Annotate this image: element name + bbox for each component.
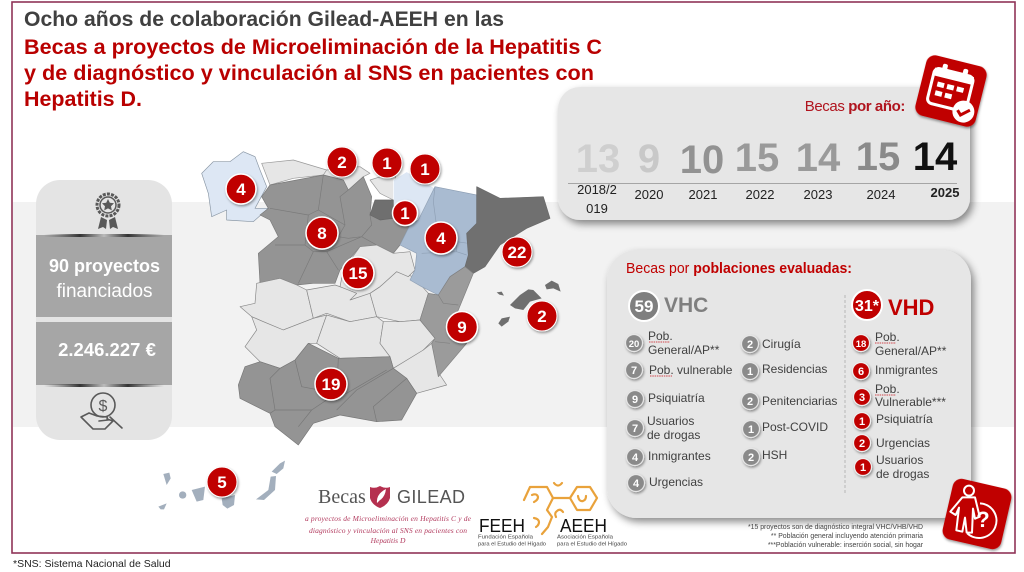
logo: FEEH AEEH: FEEH bbox=[479, 515, 525, 536]
chart: yearly values: 10 bbox=[680, 138, 724, 182]
background band bbox=[13, 202, 1014, 427]
icon: patient with question mark bbox=[941, 477, 1013, 551]
chart: yearly values: 9 bbox=[638, 137, 660, 181]
chart: yearly values: 2021 bbox=[689, 187, 717, 202]
column: VHD: Pob. bbox=[875, 382, 900, 396]
column: VHC: Usuarios bbox=[647, 414, 694, 428]
region: Asturias bbox=[262, 160, 327, 185]
title: Ocho años de colaboración Gilead-AEEH en las bbox=[24, 8, 504, 31]
footnotes: ***Población vulnerable: inserción social, sin hogar bbox=[768, 542, 924, 549]
footnotes: *15 proyectos son de diagnóstico integral VHC/VHB/VHD bbox=[748, 524, 923, 531]
heading: VHC 59: 59 bbox=[635, 297, 653, 316]
column: VHC: de drogas bbox=[647, 428, 700, 442]
column: VHC: 2 bbox=[748, 452, 754, 464]
region: Extremadura bbox=[240, 278, 327, 368]
badge: La Rioja 1: 1 bbox=[400, 204, 410, 223]
chart: yearly values bbox=[568, 135, 959, 216]
column: VHD: de drogas bbox=[876, 467, 929, 481]
title: y de diagnóstico y vinculación al SNS en pacientes con bbox=[24, 62, 594, 85]
column: VHC: 7 bbox=[631, 365, 637, 377]
icon: Gilead shield bbox=[370, 486, 390, 508]
heading: Becas por poblaciones: Becas por poblaciones evaluadas: bbox=[626, 260, 852, 277]
chart: yearly values: 2023 bbox=[804, 187, 832, 202]
region: Castilla y Leon bbox=[258, 175, 410, 285]
column: VHD: General/AP** bbox=[875, 344, 947, 358]
logo: Becas Gilead bbox=[305, 486, 472, 545]
logo: FEEH AEEH: Fundación Española bbox=[478, 534, 534, 540]
column: VHC: Cirugía bbox=[762, 337, 801, 351]
icon: calendar bbox=[913, 53, 989, 129]
chart: yearly values: 2025 bbox=[931, 185, 959, 200]
map badges: grants per region bbox=[207, 147, 557, 497]
column: VHC: 2 bbox=[747, 396, 753, 408]
chart: yearly values: 019 bbox=[586, 201, 608, 216]
region: Pais Vasco bbox=[370, 172, 397, 200]
logo: FEEH AEEH: para el Estudio del Hígado bbox=[478, 542, 546, 548]
column: VHD: 1 bbox=[860, 462, 866, 474]
heading: Becas por año: Becas por año: bbox=[805, 98, 905, 115]
column: VHC: Inmigrantes bbox=[648, 449, 711, 463]
column: VHD: Inmigrantes bbox=[875, 363, 938, 377]
region: Castilla-La Mancha bbox=[307, 245, 435, 368]
badge: Aragon 4 bbox=[425, 222, 457, 254]
column: VHD: 18 bbox=[856, 339, 866, 350]
panel: left summary card bbox=[36, 180, 172, 440]
icon: orange hexagons bbox=[524, 483, 597, 534]
badge: Castilla y Leon 8: 8 bbox=[317, 224, 327, 243]
badge: Canarias 5 bbox=[207, 467, 237, 497]
logo: Becas Gilead: Hepatitis D bbox=[370, 536, 406, 545]
panel: grants per year bbox=[558, 87, 970, 220]
footnotes: ** Población general incluyendo atención primaria bbox=[771, 533, 923, 540]
badge: Baleares 2: 2 bbox=[537, 307, 547, 326]
chart: yearly values: 2022 bbox=[746, 187, 774, 202]
column: VHC: 1 bbox=[747, 366, 753, 378]
column: VHD: Pob. bbox=[875, 330, 900, 344]
column: VHC: 7 bbox=[632, 423, 638, 435]
badge: Catalonia 22 bbox=[502, 237, 532, 267]
chart: yearly values: 2018/2 bbox=[577, 182, 617, 197]
badge: Andalucia 19 bbox=[315, 368, 347, 400]
column: VHD: 3 bbox=[859, 392, 865, 404]
logo: FEEH AEEH: AEEH bbox=[560, 515, 607, 536]
icon: hand with coin: $ bbox=[99, 398, 108, 415]
column: VHC: 1 bbox=[748, 424, 754, 436]
badge: Galicia 4 bbox=[226, 174, 256, 204]
icon: award rosette bbox=[97, 194, 119, 229]
footnotes bbox=[748, 524, 924, 549]
heading: VHD 31: VHD bbox=[888, 295, 934, 320]
chart: yearly values: 14 bbox=[796, 136, 841, 180]
logo: Becas Gilead: GILEAD bbox=[397, 487, 465, 507]
column: VHD: Psiquiatría bbox=[876, 412, 933, 426]
column: VHC: Pob. vulnerable bbox=[649, 363, 733, 377]
column: VHC: Residencias bbox=[762, 362, 827, 376]
map: Canary Islands bbox=[158, 461, 285, 509]
badge: Cantabria 1: 1 bbox=[382, 154, 392, 173]
icon: hand with coin bbox=[81, 393, 122, 429]
chart: yearly values: 2020 bbox=[635, 187, 663, 202]
title: Hepatitis D. bbox=[24, 88, 142, 111]
chart: yearly values: 2024 bbox=[867, 187, 895, 202]
column: VHC: Urgencias bbox=[649, 475, 703, 489]
column: VHD: 2 bbox=[859, 438, 865, 450]
badge: Pais Vasco 1 bbox=[410, 154, 440, 184]
column: VHD: Vulnerable*** bbox=[875, 395, 946, 409]
badge: Valencia 9 bbox=[446, 312, 478, 342]
region: Catalonia bbox=[465, 187, 550, 273]
chart: yearly values: 15 bbox=[735, 136, 779, 180]
heading: VHD 31 bbox=[852, 290, 934, 320]
badge: Asturias 2: 2 bbox=[337, 153, 347, 172]
chart: yearly values: 14 bbox=[913, 135, 958, 179]
badge: Aragon 4: 4 bbox=[436, 229, 446, 248]
metric: projects funded: financiados bbox=[56, 281, 153, 302]
region: Cantabria bbox=[323, 167, 370, 190]
region: Aragon bbox=[400, 187, 477, 295]
metric: total amount bbox=[36, 322, 172, 387]
badge: Catalonia 22: 22 bbox=[508, 243, 526, 262]
badge: Galicia 4: 4 bbox=[236, 180, 246, 199]
column: VHC: Psiquiatría bbox=[648, 391, 705, 405]
heading: VHC 59 bbox=[629, 291, 708, 321]
column: VHD: 6 bbox=[858, 366, 864, 378]
region: Navarra bbox=[393, 172, 435, 220]
region: Galicia bbox=[202, 152, 268, 222]
column: VHC: 4 bbox=[632, 452, 639, 464]
column: VHC: Pob. bbox=[648, 329, 673, 343]
column: VHC: Penitenciarias bbox=[762, 394, 837, 408]
column: VHC: General/AP** bbox=[648, 343, 720, 357]
title bbox=[24, 8, 602, 111]
column: VHC bbox=[626, 291, 837, 492]
map: Spain by region bbox=[202, 152, 561, 445]
title: Becas a proyectos de Microeliminación de la Hepatitis C bbox=[24, 36, 602, 59]
badge: La Rioja 1 bbox=[392, 200, 418, 226]
column: VHD: Usuarios bbox=[876, 453, 923, 467]
heading: VHD 31: 31* bbox=[855, 298, 880, 315]
logo: FEEH AEEH: Asociación Española bbox=[557, 534, 614, 540]
region: Comunidad Valenciana bbox=[420, 267, 473, 377]
metric: projects funded bbox=[36, 234, 172, 317]
heading: VHC 59: VHC bbox=[664, 294, 708, 317]
logo: FEEH AEEH: para el Estudio del Hígado bbox=[557, 542, 627, 548]
region: La Rioja bbox=[370, 200, 393, 220]
column: VHC: Post-COVID bbox=[762, 420, 828, 434]
region: Balearic Islands bbox=[497, 281, 561, 327]
region: Murcia bbox=[393, 343, 447, 393]
badge: Asturias 2 bbox=[327, 147, 357, 177]
panel: grants by population bbox=[607, 250, 971, 518]
footer note: *SNS: Sistema Nacional de Salud bbox=[13, 558, 171, 570]
badge: Baleares 2 bbox=[527, 301, 557, 331]
logo: Becas Gilead: Becas bbox=[318, 486, 366, 508]
badge: Pais Vasco 1: 1 bbox=[420, 160, 430, 179]
metric: projects funded: 90 proyectos bbox=[49, 256, 160, 276]
logo: FEEH AEEH bbox=[478, 483, 627, 548]
chart: yearly values: 13 bbox=[576, 137, 620, 181]
badge: Castilla y Leon 8 bbox=[306, 217, 338, 249]
badge: Madrid 15 bbox=[342, 257, 374, 289]
column: VHD bbox=[845, 290, 947, 493]
chart: yearly values: 15 bbox=[856, 135, 900, 179]
badge: Canarias 5: 5 bbox=[217, 473, 227, 492]
badge: Valencia 9: 9 bbox=[457, 318, 467, 337]
column: VHC: HSH bbox=[762, 448, 787, 462]
metric: total amount: 2.246.227 € bbox=[58, 339, 156, 360]
badge: Cantabria 1 bbox=[372, 148, 402, 178]
logo: Becas Gilead: a proyectos de Microeliminación en Hepatitis C y de bbox=[305, 514, 472, 523]
column: VHC: 9 bbox=[632, 394, 638, 406]
logo: Becas Gilead: diagnóstico y vinculación al SNS en pacientes con bbox=[309, 526, 467, 535]
badge: Andalucia 19: 19 bbox=[322, 375, 340, 394]
column: VHC: 2 bbox=[747, 339, 753, 351]
badge: Madrid 15: 15 bbox=[349, 264, 367, 283]
column: VHD: Urgencias bbox=[876, 436, 930, 450]
column: VHC: 20 bbox=[629, 339, 639, 350]
region: Andalucia bbox=[238, 343, 417, 445]
column: VHD: 1 bbox=[859, 416, 865, 428]
icon: patient with question mark: ? bbox=[976, 507, 990, 532]
column: VHC: 4 bbox=[633, 478, 640, 490]
